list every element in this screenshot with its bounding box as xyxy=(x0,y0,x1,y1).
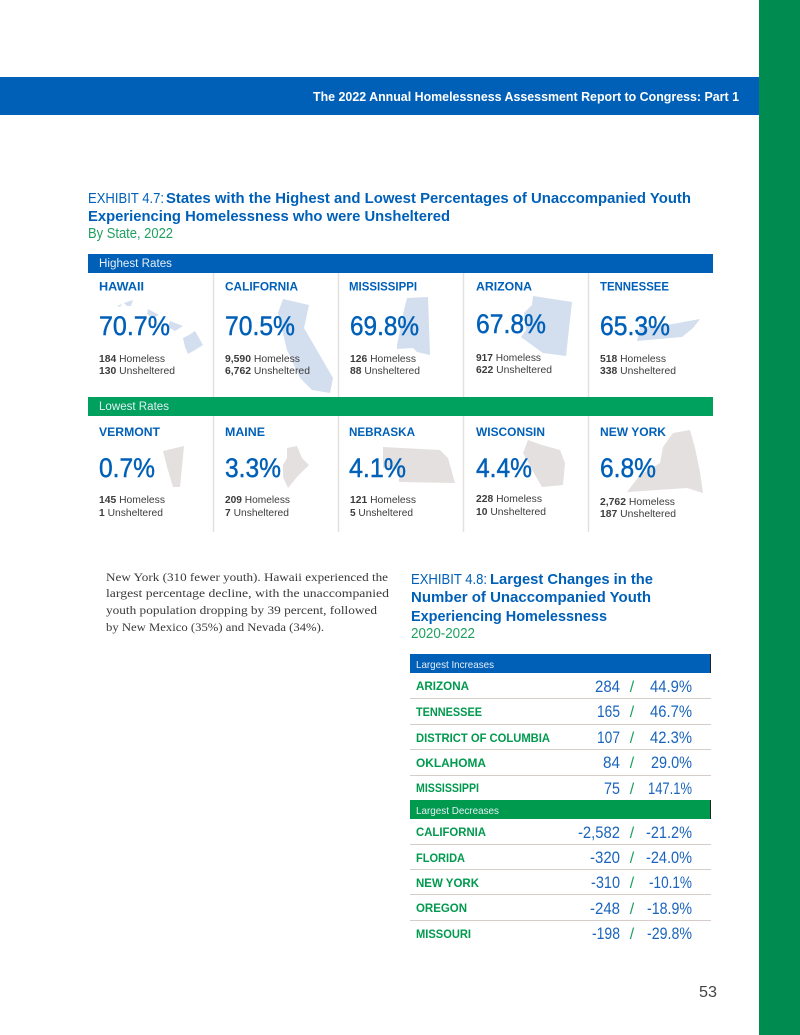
row: Arizona: 284 xyxy=(595,677,620,696)
card: Hawaii: 184 Homeless xyxy=(99,353,165,365)
exhibit 4.8 title: 2020-2022 xyxy=(411,626,475,642)
row: Missouri: -29.8% xyxy=(647,924,692,943)
page header bar: The 2022 Annual Homelessness Assessment Report to Congress: Part 1 xyxy=(313,90,739,104)
card: Mississippi xyxy=(349,280,430,377)
exhibit 4.7 title: By State, 2022 xyxy=(88,226,173,242)
card: Wisconsin: 228 Homeless xyxy=(476,493,542,505)
row: Tennessee: 165 xyxy=(597,702,620,721)
card: Vermont: VERMONT xyxy=(99,425,161,439)
panel: lowest rates xyxy=(88,397,713,532)
body text paragraph: New York (310 fewer youth). Hawaii experienced the xyxy=(106,572,388,584)
card: Nebraska: NEBRASKA xyxy=(349,425,415,439)
row: Florida: FLORIDA xyxy=(416,853,465,865)
row: Oklahoma: 84 xyxy=(603,753,620,772)
row: Missouri xyxy=(416,924,692,943)
card: Tennessee: TENNESSEE xyxy=(600,280,669,294)
card: Tennessee xyxy=(600,280,700,377)
table: largest increases xyxy=(410,654,711,798)
row: Oklahoma: 29.0% xyxy=(651,753,692,772)
row: New York: -10.1% xyxy=(649,873,692,892)
row: Florida xyxy=(416,848,692,867)
card: Nebraska: 121 Homeless xyxy=(350,494,416,506)
card: Wisconsin xyxy=(476,425,565,518)
card: Hawaii: 130 Unsheltered xyxy=(99,365,175,377)
card: Mississippi: MISSISSIPPI xyxy=(349,280,417,294)
card: California xyxy=(225,280,333,393)
row: Missouri: MISSOURI xyxy=(416,929,471,941)
card: Maine xyxy=(225,425,309,519)
card: Arizona: 917 Homeless xyxy=(476,352,541,364)
row: Tennessee: TENNESSEE xyxy=(416,707,482,719)
row: New York xyxy=(416,873,692,892)
card: New York xyxy=(600,425,703,520)
panel: lowest rates: Lowest Rates xyxy=(99,401,169,413)
row: Arizona: / xyxy=(630,679,635,696)
row: Mississippi: / xyxy=(630,781,635,798)
green side band xyxy=(759,0,800,1035)
card: Maine: MAINE xyxy=(225,425,265,439)
row: Florida: -320 xyxy=(590,848,620,867)
row: Oregon: / xyxy=(630,901,635,918)
card: Hawaii xyxy=(99,280,203,377)
card: Mississippi: 88 Unsheltered xyxy=(350,365,420,377)
card: Tennessee: 338 Unsheltered xyxy=(600,365,676,377)
row: California: -21.2% xyxy=(646,823,692,842)
page number: 53 xyxy=(699,984,717,1001)
card: California: 70.5% xyxy=(225,311,295,341)
exhibit 4.8 title: EXHIBIT 4.8: xyxy=(411,572,487,588)
row: California xyxy=(416,823,692,842)
row: Mississippi xyxy=(416,779,692,798)
row: Missouri: / xyxy=(630,926,635,943)
card: Hawaii: HAWAII xyxy=(99,280,144,294)
row: New York: / xyxy=(630,875,635,892)
card: Nebraska xyxy=(349,425,455,519)
body text paragraph: largest percentage decline, with the unaccompanied xyxy=(106,588,389,600)
row: New York: NEW YORK xyxy=(416,878,480,890)
row: Mississippi: 147.1% xyxy=(648,779,692,798)
page header bar xyxy=(0,77,759,115)
exhibit 4.8 title xyxy=(411,571,653,642)
card: Hawaii: 70.7% xyxy=(99,311,170,341)
row: Oklahoma: / xyxy=(630,755,635,772)
row: Missouri: -198 xyxy=(592,924,620,943)
card: Tennessee: 518 Homeless xyxy=(600,353,666,365)
card: Arizona: ARIZONA xyxy=(476,280,532,294)
row: Arizona xyxy=(416,677,692,696)
exhibit 4.8 title: Experiencing Homelessness xyxy=(411,608,607,625)
panel: highest rates xyxy=(88,254,713,397)
body text paragraph xyxy=(106,572,389,634)
row: District of Columbia: DISTRICT OF COLUMBIA xyxy=(416,733,550,745)
card: New York: 6.8% xyxy=(600,453,656,483)
table: largest decreases xyxy=(410,800,711,943)
table: largest decreases: Largest Decreases xyxy=(416,805,499,817)
card: New York: NEW YORK xyxy=(600,425,666,439)
row: Mississippi: 75 xyxy=(604,779,620,798)
card: New York: 187 Unsheltered xyxy=(600,508,676,520)
row: Oregon: -18.9% xyxy=(647,899,692,918)
card: Arizona: 622 Unsheltered xyxy=(476,364,552,376)
row: Oregon: -248 xyxy=(590,899,620,918)
row: Florida: / xyxy=(630,850,635,867)
table: largest increases: Largest Increases xyxy=(416,659,494,671)
row: Tennessee xyxy=(416,702,692,721)
row: California: -2,582 xyxy=(578,823,620,842)
card: California: CALIFORNIA xyxy=(225,280,298,294)
card: Vermont: 145 Homeless xyxy=(99,494,165,506)
row: New York: -310 xyxy=(591,873,620,892)
row: Tennessee: 46.7% xyxy=(650,702,692,721)
card: Maine: 3.3% xyxy=(225,453,281,483)
card: New York: 2,762 Homeless xyxy=(600,496,675,508)
card: Mississippi: 126 Homeless xyxy=(350,353,416,365)
row: Oklahoma: OKLAHOMA xyxy=(416,758,486,770)
row: District of Columbia: 42.3% xyxy=(650,728,692,747)
card: Nebraska: 4.1% xyxy=(349,453,406,483)
row: District of Columbia: 107 xyxy=(597,728,620,747)
card: Maine: 209 Homeless xyxy=(225,494,290,506)
card: Vermont xyxy=(99,425,184,519)
panel: highest rates: Highest Rates xyxy=(99,258,172,270)
card: Nebraska: 5 Unsheltered xyxy=(350,507,413,519)
card: Arizona xyxy=(476,280,572,376)
row: District of Columbia xyxy=(416,728,692,747)
exhibit 4.8 title: Largest Changes in the xyxy=(490,571,653,588)
body text paragraph: youth population dropping by 39 percent, followed xyxy=(106,605,377,617)
card: Wisconsin: 10 Unsheltered xyxy=(476,506,546,518)
exhibit 4.7 title: States with the Highest and Lowest Percentages of Unaccompanied Youth xyxy=(166,190,691,207)
card: Vermont: 1 Unsheltered xyxy=(99,507,163,519)
card: Wisconsin: WISCONSIN xyxy=(476,425,545,439)
row: Oklahoma xyxy=(416,753,692,772)
card: Vermont: 0.7% xyxy=(99,453,155,483)
row: District of Columbia: / xyxy=(630,730,635,747)
card: Mississippi: 69.8% xyxy=(350,311,419,341)
exhibit 4.8 title: Number of Unaccompanied Youth xyxy=(411,589,651,606)
exhibit 4.7 title: EXHIBIT 4.7: xyxy=(88,191,164,207)
card: California: 9,590 Homeless xyxy=(225,353,300,365)
card: Maine: 7 Unsheltered xyxy=(225,507,289,519)
row: Arizona: ARIZONA xyxy=(416,681,469,693)
card: Tennessee: 65.3% xyxy=(600,311,670,341)
card: California: 6,762 Unsheltered xyxy=(225,365,310,377)
row: Mississippi: MISSISSIPPI xyxy=(416,783,479,795)
row: Florida: -24.0% xyxy=(646,848,692,867)
card: Arizona: 67.8% xyxy=(476,309,546,339)
row: California: CALIFORNIA xyxy=(416,827,486,839)
exhibit 4.7 title xyxy=(88,190,691,242)
row: Tennessee: / xyxy=(630,704,635,721)
row: Oregon: OREGON xyxy=(416,903,467,915)
row: Arizona: 44.9% xyxy=(650,677,692,696)
row: Oregon xyxy=(416,899,692,918)
card: Wisconsin: 4.4% xyxy=(476,453,532,483)
exhibit 4.7 title: Experiencing Homelessness who were Unsheltered xyxy=(88,208,450,225)
body text paragraph: by New Mexico (35%) and Nevada (34%). xyxy=(106,622,324,634)
row: California: / xyxy=(630,825,635,842)
